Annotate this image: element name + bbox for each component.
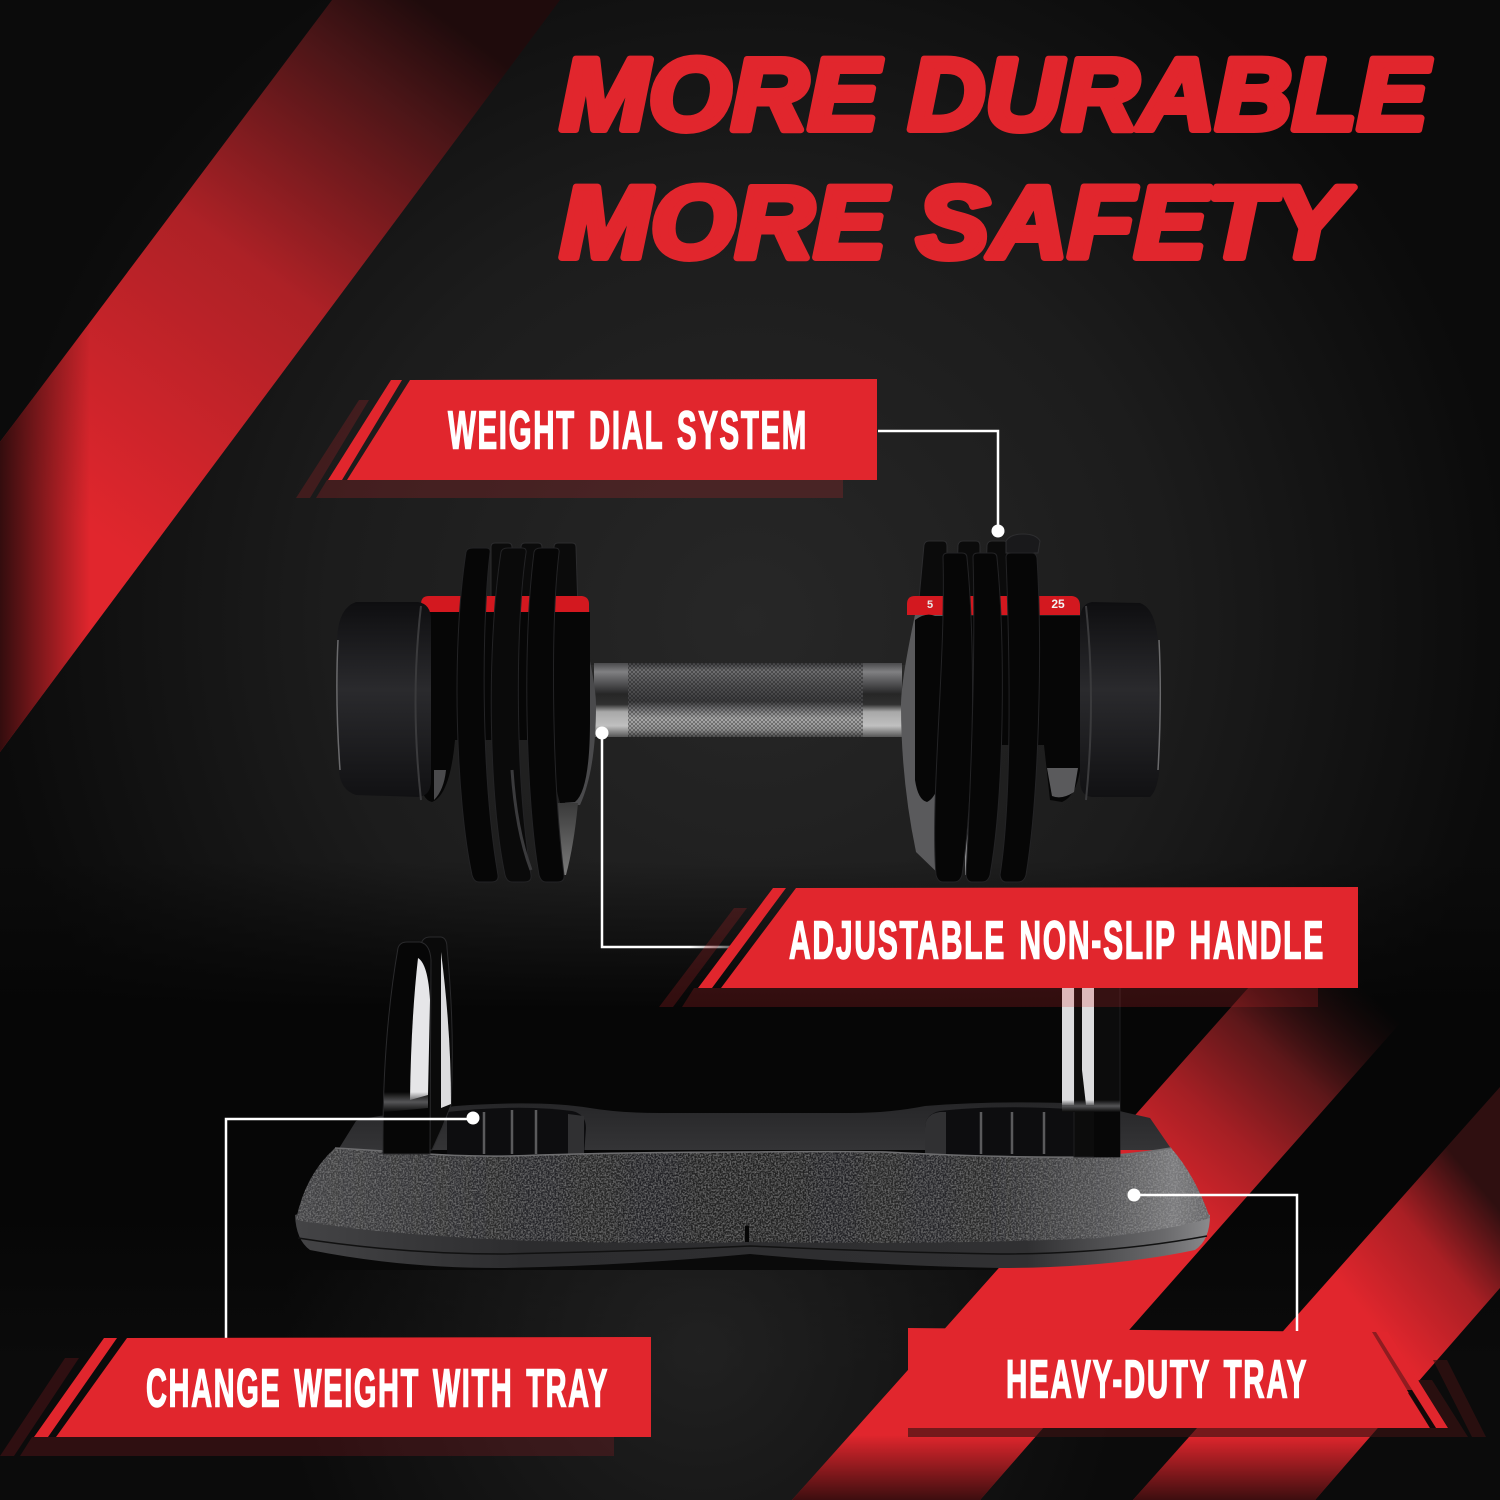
dumbbell handle bbox=[580, 663, 917, 737]
tray base bbox=[295, 1200, 1210, 1268]
title: MORE SAFETY bbox=[560, 166, 1354, 280]
title: MORE DURABLE bbox=[560, 38, 1431, 152]
tray center notch bbox=[745, 1226, 749, 1242]
tray rim highlight bbox=[335, 1148, 1171, 1157]
label: heavy-duty tray bbox=[908, 1328, 1486, 1437]
label: change weight with tray bbox=[0, 1337, 651, 1456]
title bbox=[560, 38, 1431, 280]
dumbbell right weights: 25 bbox=[1051, 597, 1065, 611]
tray body bbox=[296, 1148, 1210, 1243]
tray upright plates right bbox=[1062, 985, 1120, 1157]
label: change weight with tray: CHANGE WEIGHT WITH TRAY bbox=[146, 1358, 609, 1418]
dumbbell left weights bbox=[337, 543, 596, 882]
dumbbell right weights: 5 bbox=[927, 599, 933, 611]
leader: weight dial bbox=[878, 431, 1004, 538]
leader: handle bbox=[596, 726, 735, 947]
leader lines and dots bbox=[226, 431, 1297, 1338]
bottom-right diagonal red stripes bbox=[780, 960, 1500, 1500]
label: weight dial system bbox=[296, 379, 877, 498]
top-left diagonal red stripe bbox=[0, 0, 560, 752]
tray right compartment bbox=[925, 1107, 1085, 1156]
leader: heavy-duty tray bbox=[1128, 1188, 1297, 1331]
dumbbell tray bbox=[295, 1102, 1210, 1268]
label: adjustable non-slip handle bbox=[659, 887, 1358, 1007]
gap between label and its thin stripe bbox=[1372, 1332, 1436, 1428]
label: weight dial system: WEIGHT DIAL SYSTEM bbox=[448, 400, 808, 460]
dial knob bbox=[1006, 534, 1040, 553]
tray left compartment bbox=[447, 1108, 586, 1156]
dumbbell bbox=[337, 534, 1160, 882]
tray interior wall bbox=[338, 1102, 1172, 1150]
dumbbell right weights bbox=[901, 534, 1160, 882]
leader: change weight bbox=[226, 1112, 480, 1338]
tray upright plates left bbox=[383, 937, 452, 1154]
